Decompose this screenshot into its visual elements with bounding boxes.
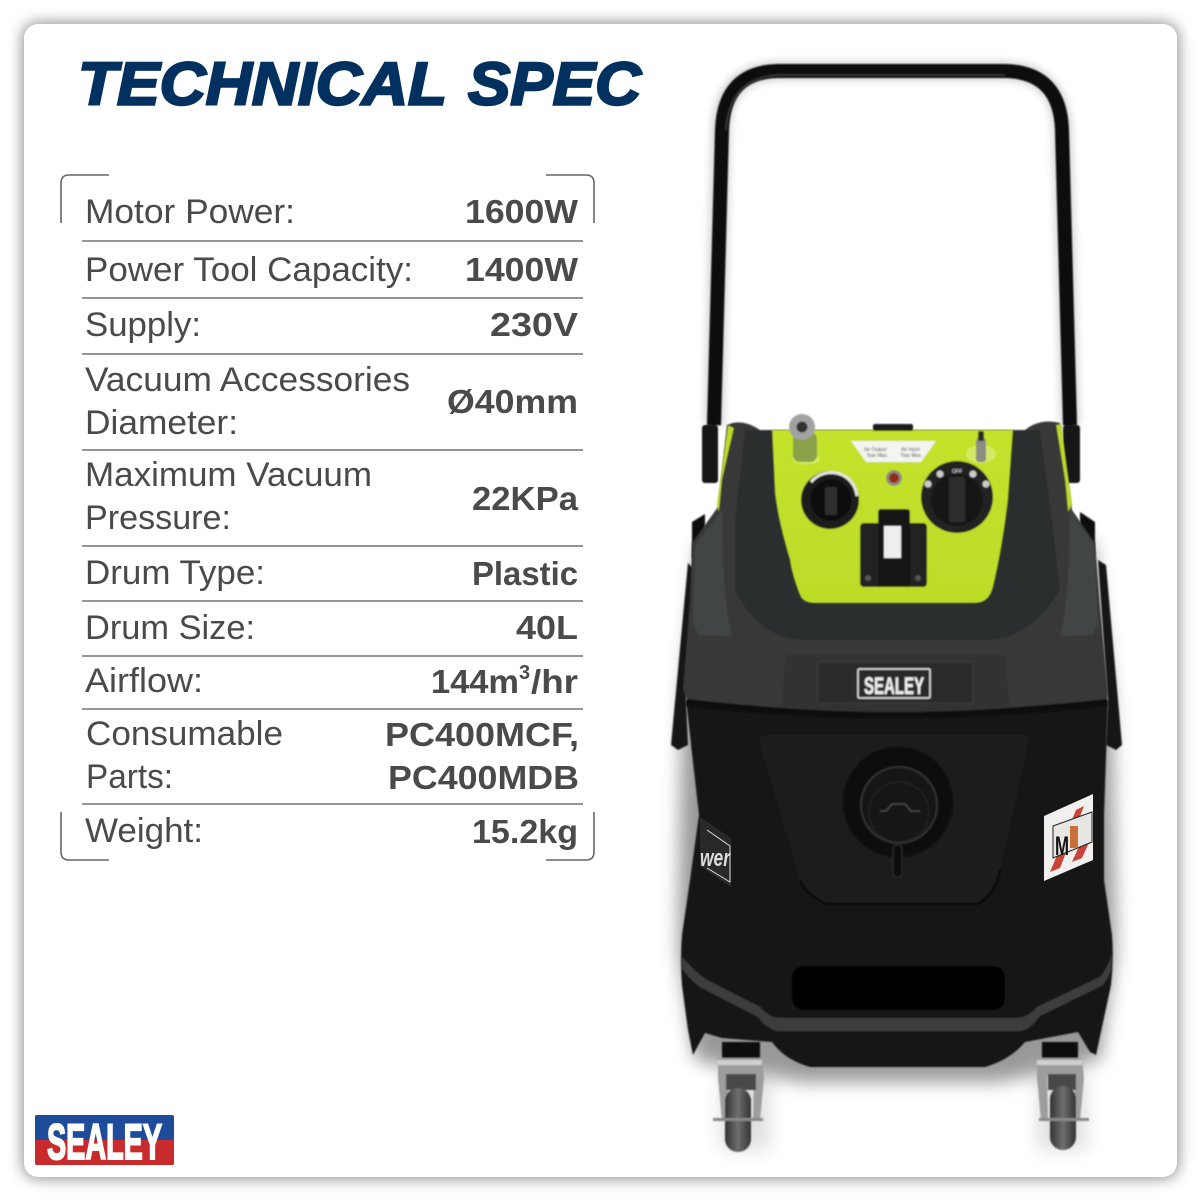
spec: vacuum accessories diameter: Ø40mm — [447, 383, 578, 420]
spec: supply: Supply: — [85, 306, 201, 344]
spec: power tool capacity: Power Tool Capacity: — [85, 251, 413, 289]
right machine label — [1044, 794, 1093, 881]
left caster — [713, 1042, 764, 1152]
spec: consumable parts: Consumable — [86, 715, 283, 753]
spec: airflow: /hr — [531, 663, 578, 700]
shoulders and lid — [683, 422, 1108, 718]
body badge — [858, 669, 930, 700]
spec: airflow: Airflow: — [85, 662, 203, 700]
spec: motor power: Motor Power: — [85, 193, 295, 231]
base highlight band — [682, 953, 1112, 1031]
title — [78, 50, 643, 118]
spec: weight: Weight: — [85, 812, 203, 850]
spec: supply: 230V — [490, 306, 578, 343]
handle frame — [702, 71, 1080, 483]
spec: drum type: Drum Type: — [85, 554, 265, 592]
spec: maximum vacuum pressure: Maximum Vacuum — [85, 456, 372, 494]
right machine label: M — [1055, 831, 1069, 861]
spec: supply — [85, 306, 578, 344]
spec: power tool capacity — [85, 251, 579, 289]
right caster — [1037, 1042, 1089, 1150]
body badge: SEALEY — [864, 673, 924, 700]
front recess panel — [760, 735, 1029, 903]
green control panel — [772, 414, 1013, 603]
spec: airflow — [85, 662, 578, 700]
spec: drum size: 40L — [516, 609, 578, 646]
spec: motor power: 1600W — [465, 193, 579, 230]
green slivers at sides — [717, 424, 1072, 512]
title: TECHNICAL — [78, 50, 447, 118]
Sealey logo: SEALEY — [47, 1114, 162, 1170]
spec: motor power — [85, 193, 579, 231]
soft product shadow — [678, 71, 1116, 1150]
lid centre panel — [782, 655, 1010, 712]
power socket — [860, 509, 927, 587]
hose port — [843, 747, 953, 877]
side clips — [671, 512, 1122, 750]
air label plate: 7bar Max. — [900, 453, 922, 459]
right dial: OFF — [952, 469, 962, 475]
drum and base — [681, 700, 1113, 1067]
specification table — [61, 175, 594, 860]
air label plate: Air Input — [901, 447, 920, 453]
spec: airflow: 3 — [519, 662, 530, 684]
dark band around green panel — [735, 430, 1060, 640]
spec: maximum vacuum pressure: Pressure: — [85, 499, 231, 537]
Sealey logo — [35, 1114, 174, 1170]
air output nozzle — [789, 414, 820, 464]
spec: maximum vacuum pressure — [85, 456, 579, 537]
spec: weight — [85, 812, 578, 850]
handle slot — [792, 936, 1005, 1010]
spec: power tool capacity: 1400W — [465, 251, 579, 288]
left machine label — [700, 817, 731, 887]
spec: consumable parts — [86, 715, 579, 796]
spec: drum type — [85, 554, 578, 592]
air label plate — [851, 441, 936, 462]
spec: drum size — [85, 609, 578, 647]
air input nozzle — [966, 431, 996, 463]
spec: drum size: Drum Size: — [85, 609, 255, 647]
spec: drum type: Plastic — [472, 555, 578, 592]
title: SPEC — [468, 50, 643, 118]
spec: airflow: 144m — [431, 663, 519, 700]
top latch — [873, 424, 913, 431]
air label plate: Air Output — [864, 447, 887, 453]
spec: consumable parts: PC400MDB — [388, 759, 579, 796]
left dial — [801, 471, 859, 529]
spec: maximum vacuum pressure: 22KPa — [472, 480, 579, 517]
spec: vacuum accessories diameter: Vacuum Accessories — [85, 361, 410, 399]
body badge panel — [818, 662, 973, 703]
spec: weight: 15.2kg — [472, 813, 578, 850]
spec: consumable parts: PC400MCF, — [385, 716, 579, 753]
product photo: vacuum extractor — [671, 71, 1122, 1152]
indicator lamp — [886, 470, 902, 486]
table corner brackets — [61, 175, 594, 860]
spec: vacuum accessories diameter — [85, 361, 578, 442]
spec: vacuum accessories diameter: Diameter: — [85, 404, 238, 442]
right dial — [921, 461, 993, 533]
air label plate: 7bar Max. — [866, 453, 888, 459]
spec: consumable parts: Parts: — [86, 758, 173, 796]
left machine label: wer — [700, 845, 731, 872]
